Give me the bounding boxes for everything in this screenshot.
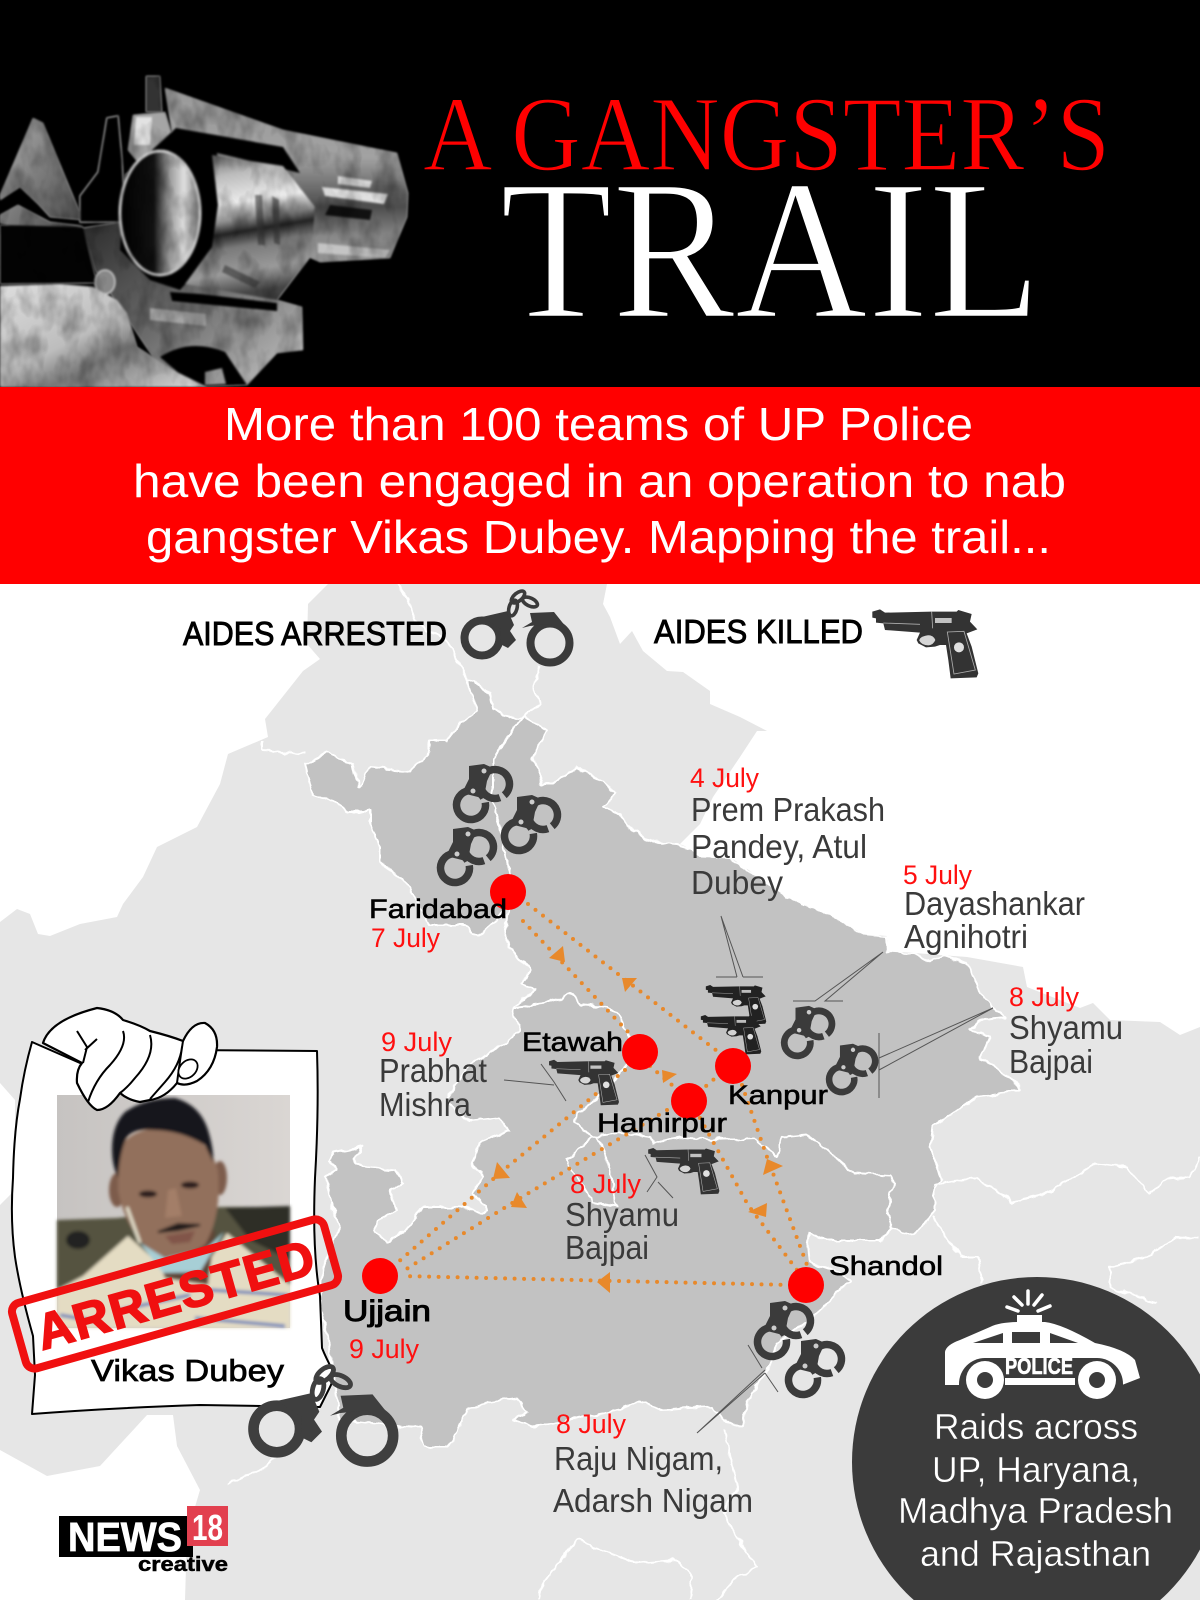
date and name annotation: Shyamu Bajpai centre: Bajpai [565,1229,649,1266]
date and name annotation: Dayashankar Agnihotri: 5 July [903,860,972,890]
top strap and sight [128,112,190,180]
hair [112,1098,213,1178]
date and name annotation: Prabhat Mishra [379,1027,487,1123]
legend: aides arrested [183,589,570,662]
date and name annotation: Shyamu Bajpai centre [565,1169,679,1266]
mask [140,1232,224,1273]
date and name annotation: Prabhat Mishra: 9 July [381,1027,452,1057]
icon: handcuffs [464,589,570,662]
nose [165,1188,182,1218]
date and name annotation: Faridabad 7 July: 7 July [371,923,440,953]
date annotation: Ujjain 9 July: 9 July [349,1334,419,1364]
barrel [165,88,408,262]
date and name annotation: Raju and Adarsh Nigam [553,1409,753,1519]
callout text: Madhya Pradesh [898,1490,1173,1531]
sofa [57,1207,290,1300]
face [118,1128,219,1257]
legend: aides killed: AIDES KILLED [654,613,863,650]
callout text [898,1406,1173,1574]
photo of Vikas Dubey [57,1095,290,1328]
lips [165,1231,195,1244]
neck [150,1230,215,1285]
legend: aides arrested: AIDES ARRESTED [183,615,447,652]
large handcuffs by poster [254,1364,393,1462]
handcuff markers [438,764,879,1397]
date and name annotation: Dayashankar Agnihotri [903,860,1085,955]
ears [109,1173,125,1207]
date and name annotation: Raju and Adarsh Nigam: 8 July [556,1409,626,1439]
date and name annotation: Dayashankar Agnihotri: Agnihotri [904,918,1028,955]
raids callout circle [852,1277,1200,1600]
date and name annotation: Dayashankar Agnihotri: Dayashankar [904,885,1085,922]
callout text: UP, Haryana, [932,1449,1140,1490]
banner text: gangster Vikas Dubey. Mapping the trail... [146,511,1051,563]
date and name annotation: Prem Prakash Pandey, Atul Dubey: Pandey, Atul [691,828,867,865]
state borders [227,584,1200,1600]
cylinder [185,155,315,300]
title [423,76,1110,361]
date and name annotation: Prabhat Mishra: Mishra [379,1086,472,1123]
callout text: and Rajasthan [920,1533,1151,1574]
place labels: Shandol [829,1251,943,1281]
hand [0,284,207,387]
black crescent around the cylinder [120,128,300,290]
location dots [362,874,824,1303]
logo: News18 creative: 18 [192,1507,223,1548]
cylinder face [120,151,200,275]
frame screw [95,270,115,294]
hand holding poster [43,1008,217,1110]
place labels: Kanpur [728,1080,828,1110]
date and name annotation: Prem Prakash Pandey, Atul Dubey: 4 July [690,763,759,793]
neighbouring land in light grey [0,584,1200,1600]
icon: police car [945,1291,1140,1399]
red banner [0,387,1200,584]
legend: aides killed [654,609,978,678]
place labels: Ujjain [343,1295,431,1328]
date and name annotation: Raju and Adarsh Nigam: Adarsh Nigam [553,1482,753,1519]
banner text [133,398,1066,563]
icon: police car: POLICE [1005,1353,1073,1379]
route arrowheads [493,946,783,1293]
place labels: Hamirpur [597,1108,727,1138]
hammer [0,118,83,232]
barrel markings [322,176,388,204]
name caption: Vikas Dubey [91,1353,285,1388]
header black band [0,0,1200,387]
map of north and central India [0,584,1200,1600]
thumb nail [175,1056,201,1082]
shirt [57,1233,290,1328]
date and name annotation: Prem Prakash Pandey, Atul Dubey [690,763,885,901]
banner text: have been engaged in an operation to nab [133,455,1066,507]
title line one: A GANGSTER’S [423,76,1110,194]
logo: News18 creative: NEWS [68,1514,182,1560]
eyes [139,1190,157,1198]
finger lines [77,1031,183,1102]
highlighted states in darker grey: Haryana, Uttar Pradesh, Madhya Pradesh [305,680,1020,1447]
callout text: Raids across [934,1406,1138,1447]
map section background [0,584,1200,1600]
icon: pistol [872,609,978,678]
trigger guard [160,346,247,387]
date and name annotation: Shyamu Bajpai east: Bajpai [1009,1043,1093,1080]
place labels: Faridabad [369,894,507,924]
date and name annotation: Shyamu Bajpai centre: Shyamu [565,1196,679,1233]
logo: News18 creative: creative [138,1554,228,1576]
leader lines [504,916,993,1433]
serial number [150,308,206,326]
date and name annotation: Prem Prakash Pandey, Atul Dubey: Dubey [691,864,783,901]
date and name annotation: Shyamu Bajpai east [1009,982,1123,1080]
frame [83,222,303,387]
shirt stripes [60,1290,288,1326]
highlighted states and borders, roughened [227,584,1200,1600]
date and name annotation: Shyamu Bajpai east: 8 July [1009,982,1079,1012]
place labels: Etawah [522,1027,623,1057]
place labels [343,894,943,1328]
dark recess beside the strap [80,116,125,222]
banner text: More than 100 teams of UP Police [224,398,973,450]
shadow under cylinder [170,292,277,311]
logo: News18 creative [59,1506,228,1576]
date and name annotation: Shyamu Bajpai east: Shyamu [1009,1009,1123,1046]
poster sheet [12,1042,333,1414]
pistol markers [549,985,766,1194]
title line two: TRAIL [500,140,1041,361]
mustache [158,1224,200,1232]
black sleeve [0,225,97,284]
date and name annotation: Prem Prakash Pandey, Atul Dubey: Prem Prakash [691,791,885,828]
arrested stamp: ARRESTED [30,1229,321,1361]
date and name annotation: Raju and Adarsh Nigam: Raju Nigam, [554,1440,723,1477]
date and name annotation: Shyamu Bajpai centre: 8 July [570,1169,641,1199]
date and name annotation: Prabhat Mishra: Prabhat [379,1052,487,1089]
trail routes [397,904,807,1293]
wanted poster held by hand [10,1008,340,1414]
revolver photograph [0,76,408,387]
cylinder engraving [222,195,280,288]
